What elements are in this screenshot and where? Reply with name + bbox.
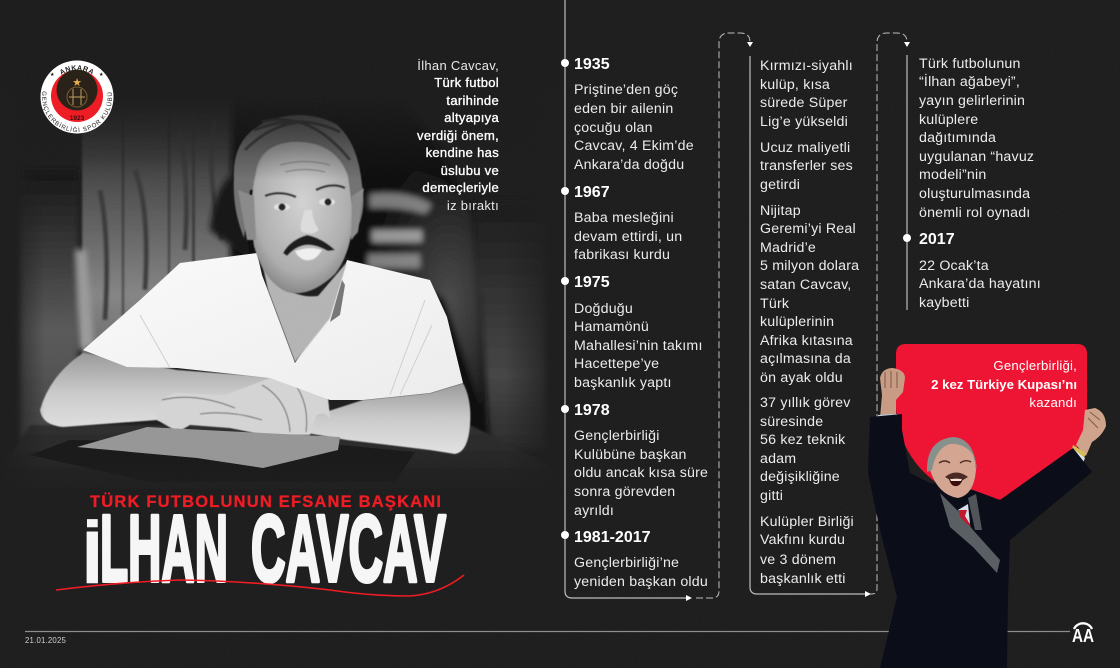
timeline column 2: getirdi [760, 177, 800, 193]
timeline column 1: Kulübüne başkan [574, 447, 687, 463]
timeline column 2: başkanlık etti [760, 571, 846, 587]
timeline column 3: Türk futbolunun [919, 56, 1021, 72]
portrait photo of İlhan Cavcav [0, 0, 560, 510]
curtains [20, 170, 546, 450]
timeline column 3: “İlhan ağabeyi”, [919, 72, 1020, 90]
timeline column 2: ve 3 dönem [760, 552, 836, 568]
club crest: ANKARA [60, 65, 93, 75]
footer line [25, 630, 1070, 632]
raised left arm [880, 368, 905, 418]
timeline column 1: sonra görevden [574, 484, 675, 500]
timeline column 2: 56 kez teknik [760, 432, 846, 448]
AA logo: AA [1072, 626, 1094, 646]
papers on desk [77, 427, 340, 468]
timeline column 2: süresinde [760, 414, 823, 430]
club crest: ★ [50, 72, 55, 78]
intro text [417, 58, 499, 213]
timeline column 2: Nijitap [760, 203, 801, 219]
head [234, 115, 364, 293]
timeline column 1: devam ettirdi, un [574, 229, 682, 245]
subtitle: TÜRK FUTBOLUNUN EFSANE BAŞKANI [90, 492, 441, 511]
timeline column 2: 37 yıllık görev [760, 395, 851, 411]
timeline column 2: kulüplerinin [760, 314, 834, 330]
timeline column 2: satan Cavcav, [760, 277, 851, 293]
timeline column 1: Priştine’den göç [574, 82, 678, 98]
timeline column 3: 22 Ocak’ta [919, 258, 989, 274]
timeline column 1: fabrikası kurdu [574, 247, 670, 263]
raised right arm [1076, 408, 1106, 456]
timeline column 1 [561, 56, 708, 590]
intro text: Türk futbol [434, 75, 499, 90]
head [930, 438, 976, 498]
timeline column 3: modeli”nin [919, 167, 986, 183]
timeline column 1: Cavcav, 4 Ekim’de [574, 138, 694, 154]
timeline column 2: adam [760, 451, 796, 467]
club crest: ★ [72, 77, 82, 89]
dashed link 2 [868, 33, 907, 594]
red callout [896, 344, 1087, 500]
wood panelling [82, 100, 238, 360]
hands [157, 375, 330, 435]
main title: LHAN [100, 496, 228, 602]
timeline column 1: 1978 [574, 402, 610, 419]
desk [0, 425, 560, 500]
main title: CAVCAV [251, 496, 446, 602]
moustache and smile [945, 472, 968, 480]
intro text: verdiği önem, [417, 128, 499, 143]
timeline column 1: 1981-2017 [574, 529, 651, 546]
white shirt [83, 253, 463, 400]
intro text: üslubu ve [441, 163, 499, 178]
timeline column 1: Mahallesi’nin takımı [574, 338, 703, 354]
timeline column 2: açılmasına da [760, 351, 851, 367]
timeline column 2: ön ayak oldu [760, 370, 843, 386]
timeline column 3: 2017 [919, 231, 955, 248]
photo edge fades [0, 0, 560, 510]
shirt and tie [958, 504, 970, 524]
red callout: 2 kez Türkiye Kupası’nı [931, 377, 1077, 392]
timeline column 2: Kulüpler Birliği [760, 514, 854, 530]
timeline column 2: Lig’e yükseldi [760, 114, 848, 130]
intro text: iz bıraktı [447, 198, 499, 213]
club crest: ★ [99, 72, 104, 78]
timeline column 2: gitti [760, 488, 783, 504]
timeline column 3: dağıtımında [919, 130, 996, 146]
intro text: tarihinde [446, 93, 499, 108]
timeline column 1: Gençlerbirliği’ne [574, 555, 679, 571]
scarf [940, 493, 1000, 573]
timeline column 1: ayrıldı [574, 503, 614, 519]
timeline column 2: kulüp, kısa [760, 77, 830, 93]
timeline column 1: Baba mesleğini [574, 210, 674, 226]
intro text: altyapıya [444, 110, 499, 125]
red callout: Gençlerbirliği, [993, 358, 1077, 373]
timeline column 2 [760, 58, 859, 587]
intro text: demeçleriyle [422, 180, 499, 195]
intro text: İlhan Cavcav, [417, 58, 499, 73]
timeline column 3 [903, 56, 1041, 311]
timeline column 1: Ankara’da doğdu [574, 157, 684, 173]
timeline column 2: 5 milyon dolara [760, 258, 859, 274]
timeline column 1: Gençlerbirliği [574, 428, 660, 444]
timeline column 2: Afrika kıtasına [760, 333, 853, 349]
red swoosh [56, 575, 464, 596]
timeline connectors [565, 0, 907, 598]
timeline column 3: Ankara’da hayatını [919, 276, 1041, 292]
solid line 2 [750, 56, 866, 594]
timeline column 1: 1967 [574, 184, 610, 201]
red callout: kazandı [1029, 395, 1077, 410]
timeline column 2: Ucuz maliyetli [760, 140, 850, 156]
main title: İ [82, 516, 103, 599]
timeline column 2: Madrid’e [760, 240, 816, 256]
timeline column 1: yeniden başkan oldu [574, 574, 708, 590]
timeline column 1: 1975 [574, 274, 610, 291]
timeline column 1: eden bir ailenin [574, 101, 673, 117]
timeline column 2: Kırmızı-siyahlı [760, 58, 853, 74]
timeline column 1: Doğduğu [574, 301, 633, 317]
timeline column 3: kulüplere [919, 112, 978, 128]
timeline column 3: önemli rol oynadı [919, 205, 1030, 221]
date: 21.01.2025 [25, 636, 66, 645]
solid line 3 [906, 55, 908, 310]
timeline column 2: transferler ses [760, 158, 853, 174]
coat [868, 414, 1092, 668]
timeline column 2: Vakfını kurdu [760, 532, 845, 548]
timeline column 1: oldu ancak kısa süre [574, 465, 708, 481]
arms [40, 353, 470, 454]
timeline column 1: 1935 [574, 56, 610, 73]
timeline column 3: kaybetti [919, 295, 970, 311]
timeline column 2: sürede Süper [760, 95, 848, 111]
eyes [939, 461, 971, 463]
club crest: 1923 [70, 115, 85, 122]
timeline column 1: Hacettepe’ye [574, 356, 659, 372]
solid line 1 [565, 0, 688, 598]
timeline column 1: çocuğu olan [574, 120, 653, 136]
neck [262, 262, 347, 362]
timeline column 3: uygulanan “havuz [919, 149, 1034, 165]
timeline column 2: değişikliğine [760, 469, 840, 485]
arrowheads [686, 42, 910, 601]
timeline column 2: Geremi’yi Real [760, 221, 856, 237]
intro text: kendine has [426, 145, 499, 160]
timeline column 3: yayın gelirlerinin [919, 93, 1025, 109]
cheering man [868, 368, 1106, 668]
leather chair [210, 100, 490, 450]
club crest: GENÇLERBİRLİĞİ SPOR KULÜBÜ [42, 92, 112, 132]
timeline column 1: Hamamönü [574, 319, 649, 335]
dashed link 1 [696, 33, 750, 598]
club crest [40, 60, 114, 134]
timeline column 3: oluşturulmasında [919, 186, 1030, 202]
timeline column 2: Türk [760, 296, 790, 312]
timeline column 1: başkanlık yaptı [574, 375, 672, 391]
